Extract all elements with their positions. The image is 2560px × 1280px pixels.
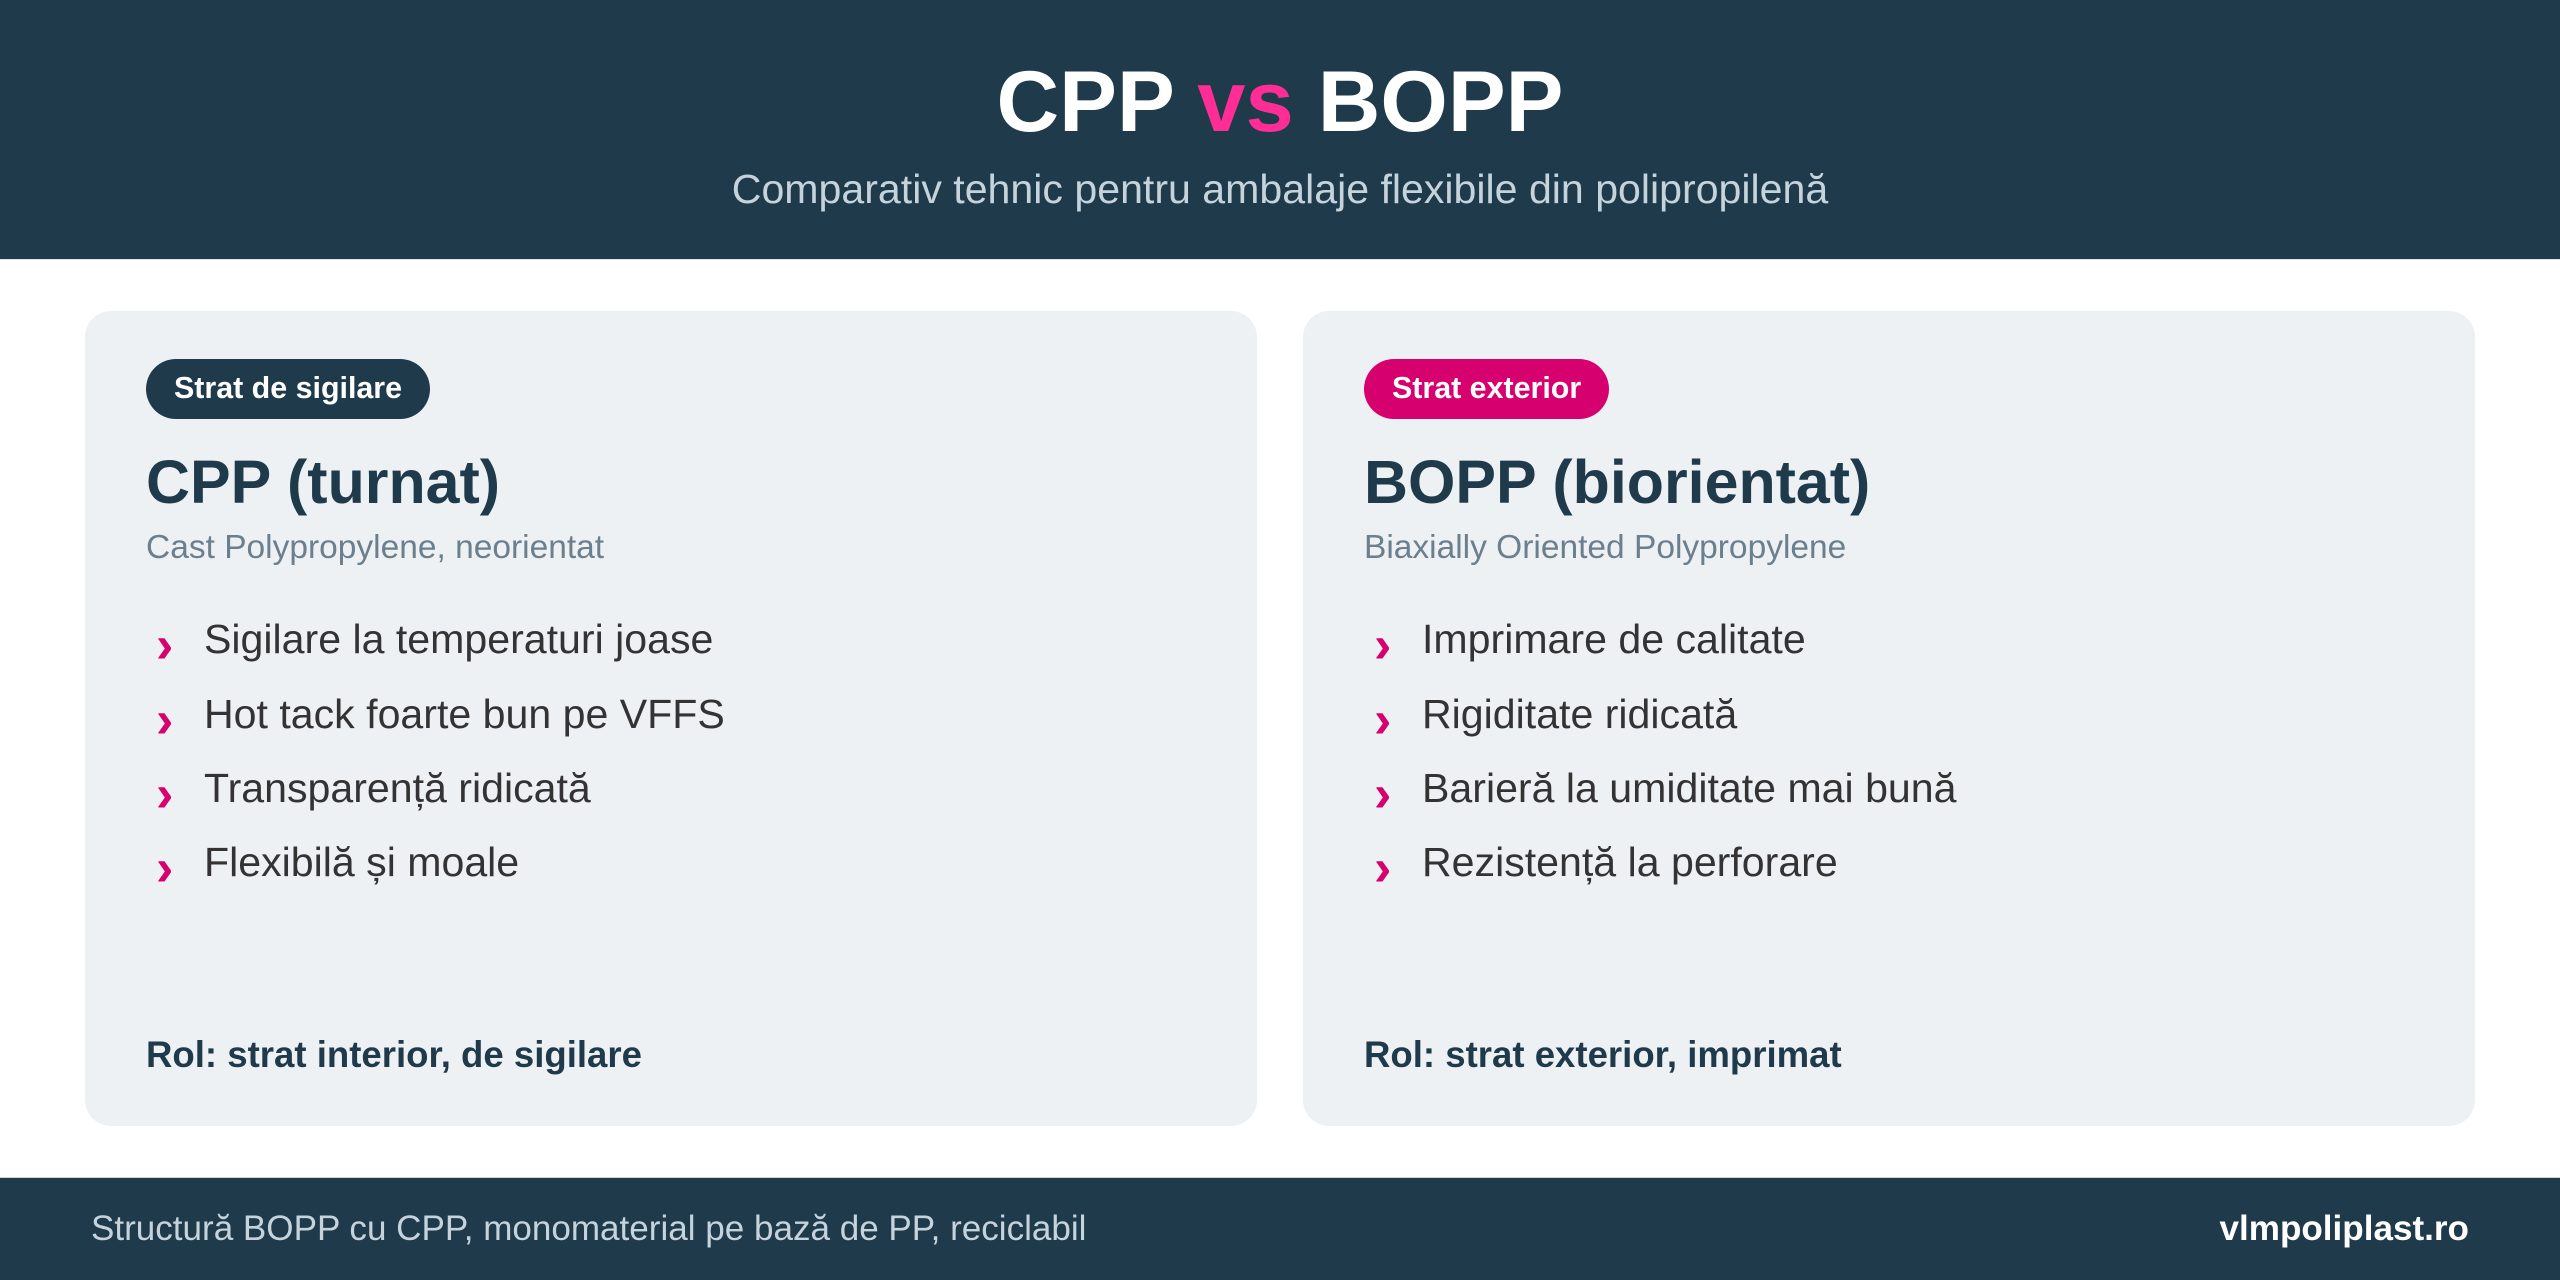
role: CPP: Rol: strat interior, de sigilare [146, 1034, 642, 1075]
list item: stiffness: Rigiditate ridicată [1422, 691, 1737, 737]
list item: puncture resistance: › [1374, 839, 1391, 897]
badge: sealing layer: Strat de sigilare [174, 371, 402, 405]
role: BOPP: Rol: strat exterior, imprimat [1364, 1034, 1842, 1075]
list item: stiffness: › [1374, 691, 1391, 749]
list item: flexible [156, 839, 519, 897]
subheading: BOPP: Biaxially Oriented Polypropylene [1364, 529, 1846, 566]
subheading: CPP: Cast Polypropylene, neorientat [146, 529, 604, 566]
panel: CPP [85, 311, 1257, 1126]
footer note: Structură BOPP cu CPP, monomaterial pe bază de PP, reciclabil [91, 1209, 1086, 1248]
heading: CPP: CPP (turnat) [146, 448, 500, 516]
header band [0, 0, 2560, 259]
list item: print quality: Imprimare de calitate [1422, 616, 1806, 662]
list item: transparency: › [156, 765, 173, 823]
list item: hot tack: Hot tack foarte bun pe VFFS [204, 691, 725, 737]
title: CPP vs BOPP [997, 54, 1563, 150]
heading: BOPP: BOPP (biorientat) [1364, 448, 1870, 516]
footer band [0, 1178, 2560, 1280]
website: vlmpoliplast.ro [2220, 1209, 2469, 1248]
list item: moisture barrier: Barieră la umiditate mai bună [1422, 765, 1956, 811]
list item: hot tack: › [156, 691, 173, 749]
list item: puncture resistance: Rezistență la perforare [1422, 839, 1838, 885]
list item: moisture barrier: › [1374, 765, 1391, 823]
badge: outer layer: Strat exterior [1392, 371, 1581, 405]
badge: outer layer [1364, 359, 1609, 419]
list item: print quality: › [1374, 616, 1391, 674]
badge: sealing layer [146, 359, 430, 419]
panel: BOPP [1303, 311, 2475, 1126]
list item: flexible: › [156, 839, 173, 897]
list item: transparency: Transparență ridicată [204, 765, 591, 811]
subtitle: Comparativ tehnic pentru ambalaje flexibile din polipropilenă [732, 166, 1828, 212]
list item: stiffness [1374, 691, 1738, 749]
list item: low temperature sealing: Sigilare la temperaturi joase [204, 616, 713, 662]
list item: flexible: Flexibilă și moale [204, 839, 519, 885]
list item: low temperature sealing: › [156, 616, 173, 674]
